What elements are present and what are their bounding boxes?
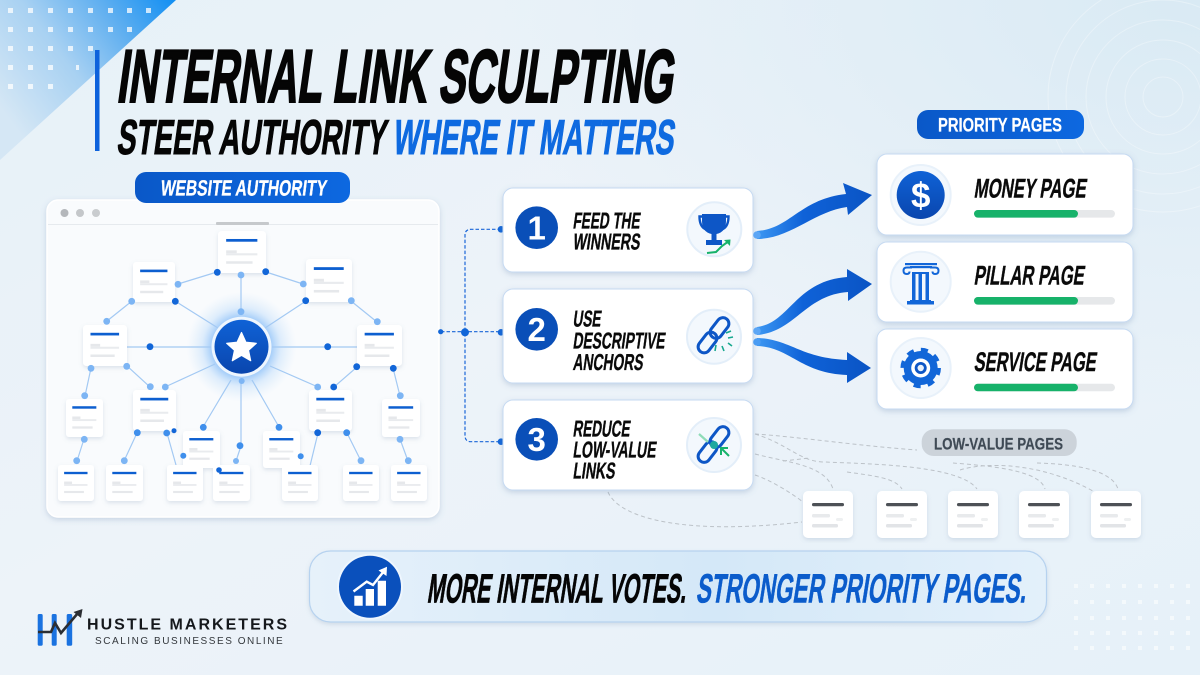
step 3 text: LINKS [572,458,617,484]
logo: hustle marketers [38,609,287,647]
top-right decorative rings [1048,0,1200,212]
low-value pages label: LOW-VALUE PAGES [934,434,1063,453]
website authority label [135,172,350,203]
low-value card 1 [803,491,853,538]
card center left [183,431,220,468]
step 1 number: 1 [528,210,546,246]
title block [95,34,682,165]
browser window [47,200,439,517]
icon: growth chart [337,554,403,620]
step 1 text [572,207,642,254]
low-value card 2 [877,491,927,538]
card left [83,325,127,366]
card far left [66,399,103,437]
banner message: MORE INTERNAL VOTES. [425,566,691,611]
priority card: money page [877,154,1133,235]
icon: dollar [891,165,951,225]
panel: website authority [47,172,439,517]
step 2 card [503,289,753,383]
step 2 text: ANCHORS [572,349,645,375]
bottom card 4 [213,465,250,501]
logo name: HUSTLE MARKETERS [87,616,287,633]
step 1 card [503,188,753,272]
low-value pages label [922,429,1077,456]
card center right [263,431,300,468]
icon: link being removed [687,418,741,472]
title accent bar [95,50,100,151]
money page title: MONEY PAGE [973,173,1089,204]
center star hub [212,317,272,377]
arrow: anchors to pillar page [753,269,872,335]
priority pages label: PRIORITY PAGES [938,116,1062,136]
service page title: SERVICE PAGE [973,346,1099,377]
bottom card 3 [167,465,203,501]
title line 2 accent: WHERE IT MATTERS [390,110,679,165]
low-value card 5 [1091,491,1141,538]
low-value dashed links [608,434,1118,527]
icon: gear [891,338,951,398]
card mid left [133,390,176,431]
bottom card 5 [282,465,318,501]
network nodes [73,268,412,473]
website authority label: WEBSITE AUTHORITY [159,175,329,200]
bottom card 7 [391,465,427,501]
step 3 number [515,418,558,461]
arrow: anchors to service page [753,338,871,383]
bottom-right decorative dots [1074,584,1190,650]
icon: dollar: $ [911,176,930,216]
title line 1: INTERNAL LINK SCULPTING [114,34,682,118]
step 3 number: 3 [528,421,546,458]
bottom card 6 [343,465,379,501]
low-value card 4 [1019,491,1069,538]
center glow [186,292,296,402]
service page progress bar [974,384,1115,391]
step 3 card [503,400,753,490]
card right [357,325,402,366]
network links [77,272,408,470]
priority pages label [917,110,1084,139]
pillar page progress bar [974,297,1115,305]
page cards [58,231,427,501]
step 1 text: FEED THE [572,207,642,233]
bottom card 1 [58,465,94,501]
money page progress bar [974,210,1115,218]
step 1 number [515,206,558,249]
priority card: pillar page [877,242,1133,322]
step 3 text: REDUCE [572,416,632,442]
title line 2: STEER AUTHORITY [114,110,391,165]
icon: link with sparks [687,310,741,364]
icon: trophy [687,202,741,256]
bottom card 2 [106,465,143,501]
pillar page title: PILLAR PAGE [973,259,1087,290]
arrow: feed the winners to money page [753,183,872,239]
low-value card 3 [948,491,998,538]
step 3 text [572,416,658,484]
priority card: service page [877,329,1133,409]
step 2 number [515,308,558,351]
top-left decorative triangle [0,0,176,160]
card far right [382,399,420,437]
logo mark [38,609,82,646]
card upper left [133,262,175,302]
step 1 text: WINNERS [572,228,642,254]
step 2 text [572,306,667,375]
low-value page cards [803,491,1141,538]
bottom banner [310,551,1046,622]
step 3 text: LOW-VALUE [572,436,658,462]
icon: pillar [891,252,951,312]
step 2 text: DESCRIPTIVE [572,328,667,354]
step 2 text: USE [572,306,603,332]
card top [218,231,266,273]
dashed connector to steps [438,226,504,445]
window chrome [48,209,438,225]
step 2 number: 2 [528,311,546,348]
logo tagline: SCALING BUSINESSES ONLINE [95,636,283,647]
card upper right [306,259,352,302]
card mid right [309,390,352,431]
